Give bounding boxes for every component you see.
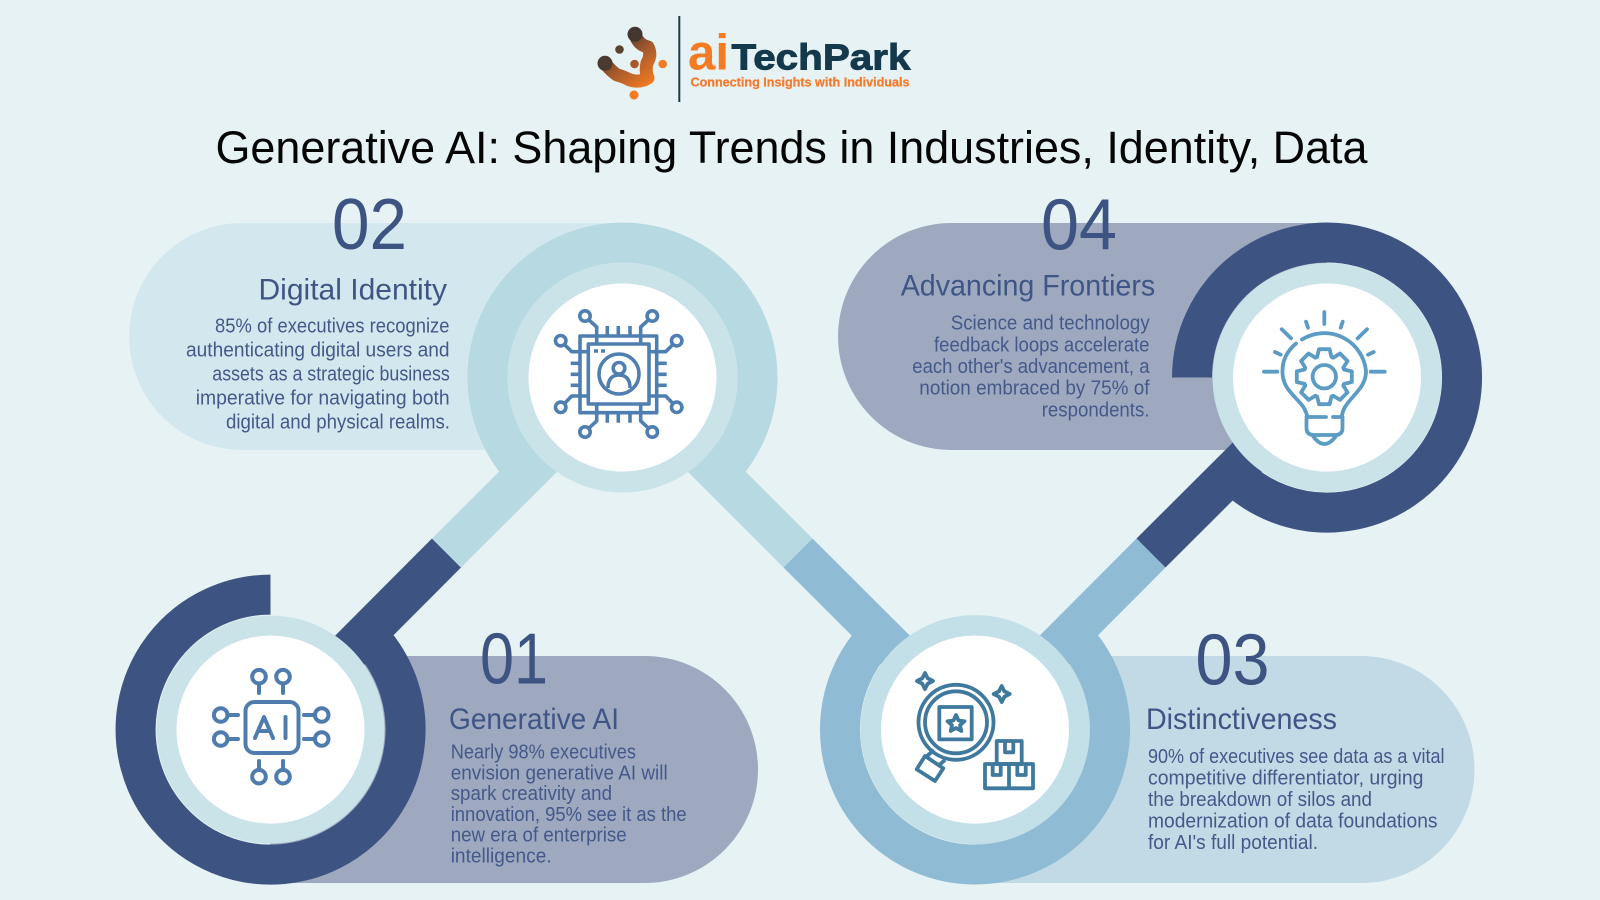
title: Generative AI: Shaping Trends in Industries, Identity, Data [216,122,1368,173]
text block: Distinctiveness [1148,746,1444,854]
text block: Distinctiveness: for AI's full potential. [1148,832,1318,854]
icon: AI chip [214,670,329,784]
text block: Generative AI: Nearly 98% executives [451,741,636,763]
logo wordmark: ai [688,24,729,80]
text block: Digital Identity: digital and physical realms. [226,412,450,434]
heading: Distinctiveness: Distinctiveness [1146,703,1337,736]
text block: Generative AI: innovation, 95% see it as the [451,804,687,826]
number 03: 03 [1196,620,1270,700]
panel: 02 Digital Identity [129,185,622,450]
text block: Generative AI: envision generative AI will [451,762,668,784]
text block: Generative AI [451,741,687,868]
icon: chip with person [556,311,682,437]
text block: Digital Identity [186,316,450,434]
icon: magnifier with boxes [917,673,1033,788]
text block: Distinctiveness: modernization of data foundations [1148,810,1438,832]
text block: Generative AI: intelligence. [451,846,552,868]
text block: Advancing Frontiers: notion embraced by 75% of [919,378,1150,400]
number 04: 04 [1041,185,1117,265]
panel: 01 Generative AI [270,619,758,883]
node 04: ring [1192,243,1462,513]
icon: light bulb with gear [1264,312,1385,444]
text block: Distinctiveness: 90% of executives see data as a vital [1148,746,1444,768]
pill: 04 [838,223,1327,450]
text block: Advancing Frontiers: respondents. [1042,399,1150,421]
logo tagline: Connecting Insights with Individuals [690,76,910,90]
connector: 03 to 04 [975,378,1327,730]
heading: Advancing Frontiers: Advancing Frontiers [901,270,1155,303]
node 03: ring [840,615,1110,865]
text block: Advancing Frontiers [912,312,1150,421]
pill: 02 [129,223,622,450]
text block: Advancing Frontiers: Science and technology [951,312,1150,334]
pill: 01 [270,656,758,883]
logo: aiTechPark: TechPark [732,36,912,77]
pill: 03 [975,656,1474,883]
panel: 04 Advancing Frontiers [838,185,1327,450]
text block: Advancing Frontiers: feedback loops accelerate [934,334,1150,356]
logo divider [678,16,680,102]
number 01: 01 [480,619,548,699]
text block: Distinctiveness: competitive differentiator, urging [1148,768,1424,790]
text block: Digital Identity: assets as a strategic business [212,364,450,386]
connector: 02 to 03 [622,378,975,730]
text block: Digital Identity: authenticating digital users and [186,340,450,362]
number 02: 02 [332,185,407,265]
text block: Digital Identity: 85% of executives recognize [215,316,450,338]
connector: 01 to 02 [270,378,622,730]
text block: Generative AI: new era of enterprise [451,825,627,847]
heading: Generative AI: Generative AI [449,703,619,736]
node 01: ring [136,595,406,865]
logo mark [598,27,667,99]
panel: 03 Distinctiveness [975,620,1474,883]
logo: aiTechPark [598,16,912,102]
heading: Digital Identity: Digital Identity [258,273,447,306]
node 02: ring [488,243,758,492]
text block: Advancing Frontiers: each other's advancement, a [912,356,1150,378]
text block: Distinctiveness: the breakdown of silos and [1148,789,1372,811]
text block: Digital Identity: imperative for navigating both [196,388,450,410]
text block: Generative AI: spark creativity and [451,783,612,805]
